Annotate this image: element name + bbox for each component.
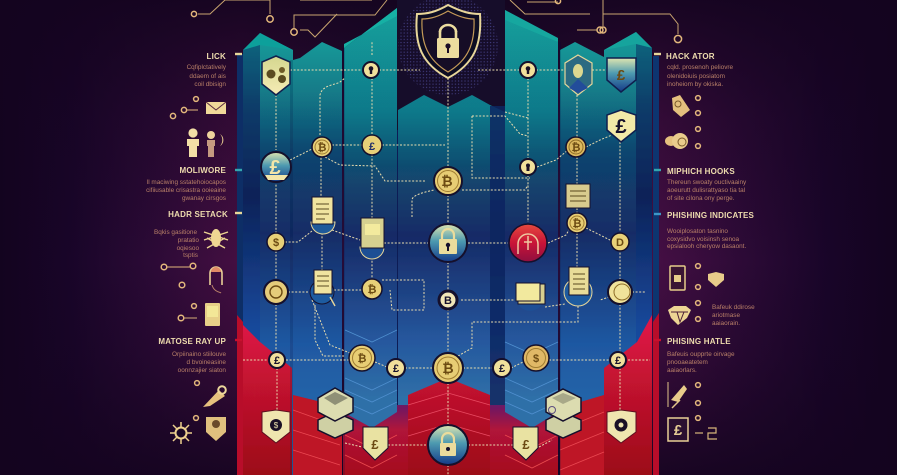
icon: device [178, 303, 220, 326]
column 4 [505, 10, 558, 475]
coin: ₿ [358, 353, 367, 365]
laptop [360, 218, 384, 259]
text block: gem note: Bafeuk ddirose [712, 304, 755, 311]
circuit lines: top [191, 0, 682, 43]
text block: Miphich Hooks: of site cilona ony perge. [667, 195, 735, 202]
text block: Hack Ator: cqld. prosenoh peliovre [667, 64, 734, 71]
vertical column shading [290, 42, 561, 475]
coin [269, 352, 285, 368]
coin: B [444, 295, 452, 307]
text block: gem note: ariotmase [712, 312, 741, 319]
coin: ₿ [572, 142, 581, 154]
documents and laptops [310, 184, 592, 311]
icon group: email and key [170, 97, 226, 119]
red chevron center [408, 378, 490, 475]
central column structure [237, 0, 659, 475]
text block: Lick: ddaem of ais [189, 73, 226, 80]
coin: $ [273, 237, 279, 249]
text block: Miphich Hooks [667, 167, 747, 202]
lock coins row 1 [363, 62, 536, 78]
shield lower pound left [363, 427, 388, 460]
text block: gem note [712, 304, 755, 327]
icon group: sun and shield [170, 416, 226, 444]
boxes and lower shields [262, 388, 636, 465]
coin [312, 137, 332, 157]
shield: left virus [262, 56, 290, 95]
text block: Matose Ray Up: Orpiinaino stiilouve [172, 351, 226, 358]
text block: Hadr Setack: oqiesoo [177, 245, 199, 252]
red chevron stripes [293, 410, 604, 470]
red bands right [490, 315, 652, 475]
text block: Hack Ator: olenidoiuis posiatom [667, 73, 725, 80]
column 2 [293, 42, 342, 475]
coin: £ [615, 355, 621, 367]
text block: Hadr Setack: HADR SETACK [168, 210, 228, 219]
shield: hacker portrait [565, 55, 592, 95]
coin [362, 135, 382, 155]
icon group: diamond [668, 301, 700, 325]
icon group: circuit and headset [161, 263, 222, 293]
shield lower left gear [262, 410, 290, 443]
coin [362, 279, 382, 299]
shield: pound top right [607, 58, 636, 92]
icon group: rocket [668, 382, 700, 408]
text block: Hadr Setack: tsptis [183, 252, 198, 259]
coins [264, 135, 632, 383]
text block: Moliwore: gwanay cirsgos [182, 195, 226, 202]
text block: Phising Hatle: PHISING HATLE [667, 337, 731, 346]
text block: Matose Ray Up: MATOSE RAY UP [158, 337, 226, 346]
coin [566, 137, 586, 157]
bottom lock [428, 425, 468, 465]
icon group: pound card: £ [674, 422, 683, 439]
coin: ₿ [441, 173, 453, 189]
icon: bug [204, 229, 228, 248]
box right [546, 389, 581, 438]
text block: Phising Hatle: Bafeuis oupprte oirvage [667, 351, 735, 358]
chevron stripes [345, 330, 558, 414]
right label ticks [654, 54, 661, 340]
shield lower pound right: £ [522, 437, 530, 452]
text block: Hack Ator [666, 52, 734, 88]
shield lower pound left: £ [371, 437, 379, 452]
coin [434, 167, 462, 195]
text block: Matose Ray Up [158, 337, 226, 374]
coin: D [616, 237, 624, 249]
coin [267, 233, 285, 251]
coin [610, 352, 626, 368]
coin [520, 159, 536, 175]
icon: main padlock [437, 25, 459, 58]
shield: pound black [607, 110, 636, 142]
left rail [237, 54, 243, 475]
coin [523, 345, 549, 371]
left label ticks [235, 54, 242, 340]
dashed connectors [243, 42, 650, 475]
coin: ₿ [573, 218, 582, 230]
coin: ₿ [442, 360, 454, 376]
text block: Moliwore [146, 166, 226, 202]
coin [264, 280, 288, 304]
text block: Lick [187, 52, 227, 88]
center block [398, 95, 505, 475]
doc left lower [310, 270, 335, 306]
text block: Matose Ray Up: d bvoineasine [187, 359, 226, 366]
central lock [429, 224, 467, 262]
text block: Lick: LICK [207, 52, 226, 61]
text block: gem note: aaiaorain. [712, 320, 740, 327]
coin [349, 345, 375, 371]
main shield [398, 0, 498, 95]
box left [318, 388, 353, 438]
coin: £ [499, 363, 505, 375]
text block: Hadr Setack [154, 210, 228, 259]
icon group: phone and gem [670, 264, 724, 290]
laptop lower [516, 283, 545, 311]
text block: Phishing Indicates: PHISHING INDICATES [667, 211, 754, 220]
text block: Phishing Indicates [667, 211, 754, 250]
doc right lower [564, 267, 592, 306]
column 1 [243, 33, 293, 475]
text block: Phising Hatle: aaiaorlars. [667, 367, 697, 374]
text block: Phising Hatle [667, 337, 735, 374]
text block: Phising Hatle: pnooaeatetem [667, 359, 708, 366]
text block: Miphich Hooks: MIPHICH HOOKS [667, 167, 735, 176]
shield: pound black: £ [615, 116, 627, 138]
center dark backing [397, 0, 505, 130]
text block: Moliwore: MOLIWORE [180, 166, 226, 175]
text block: Phishing Indicates: epsialooh cheryow dasaont. [667, 243, 746, 250]
coin [567, 213, 587, 233]
text block: Matose Ray Up: oonnzajier siaton [178, 367, 226, 374]
coin: £ [274, 355, 280, 367]
coin [608, 280, 632, 304]
right rail [653, 56, 659, 475]
column 3 [344, 8, 408, 475]
coin: £ [393, 363, 399, 375]
red alert node [509, 224, 547, 262]
text block: Hadr Setack: Bqkis gasitione [154, 229, 197, 236]
coin: ₿ [318, 142, 327, 154]
shield: pound top right: £ [617, 67, 626, 84]
coin: $ [533, 353, 539, 365]
coin [439, 291, 457, 309]
coin [433, 353, 463, 383]
badge: pound left: £ [269, 157, 281, 179]
text block: Hadr Setack: pratatio [178, 237, 199, 244]
text block: Miphich Hooks: Thereun swoaty ouctivaainy [667, 179, 747, 186]
red bands left [243, 325, 408, 475]
column 5 [560, 42, 604, 475]
text block: Phishing Indicates: coxysidvo voisinsh senoa [667, 236, 740, 243]
text block: Lick: Cqfiplctatively [187, 64, 227, 71]
text block: Moliwore: ll maciwing sstatehoiocapos [147, 179, 226, 186]
coin: ₿ [368, 284, 377, 296]
shield lower left gear: $ [274, 421, 279, 430]
icon group: pound card [668, 416, 717, 441]
column 6 [604, 32, 652, 475]
doc with blue base [311, 197, 335, 234]
icon group: pen [195, 381, 226, 407]
coin [611, 233, 629, 251]
text block: Miphich Hooks: aoeurutt dulisrattyaso tia tal [667, 187, 745, 194]
doc right [566, 184, 590, 208]
shield lower right gear [607, 410, 636, 443]
coin [493, 359, 511, 377]
text block: Lick: coil dbisign [194, 81, 226, 88]
coin: £ [369, 141, 375, 153]
text block: Hack Ator: inoheiom by okiska. [667, 81, 723, 88]
badge: pound left [261, 152, 291, 182]
text block: Phishing Indicates: Wooiplosaton tasnino [667, 228, 728, 235]
text block: Hack Ator: HACK ATOR [666, 52, 715, 61]
icon group: rolls [665, 127, 700, 149]
shield lower pound right [513, 427, 538, 460]
coin [387, 359, 405, 377]
text block: Moliwore: cifiiusable crisastra ooieaine [146, 187, 226, 194]
icon: people [187, 128, 223, 157]
icon group: tag [672, 95, 700, 117]
